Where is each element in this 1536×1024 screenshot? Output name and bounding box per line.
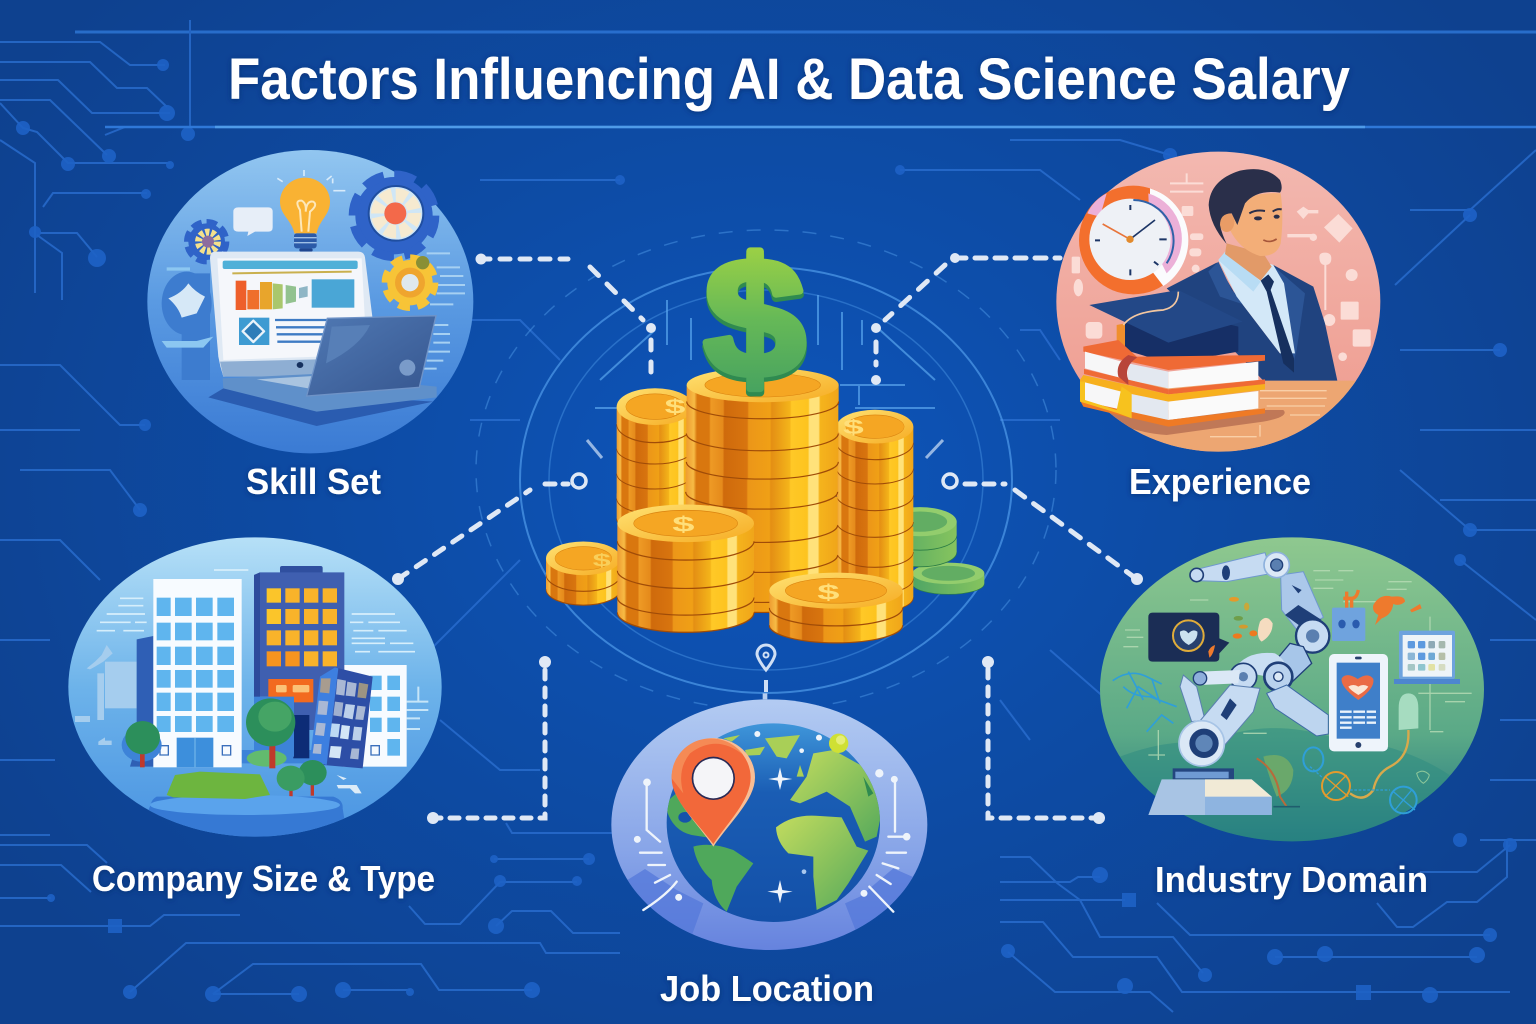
panel: skill set <box>147 150 473 453</box>
panel disc <box>68 537 442 837</box>
icon: large gear <box>353 175 435 256</box>
dollar sign: $ <box>704 224 805 413</box>
icon: DNA helix <box>1303 747 1429 813</box>
lower book <box>1080 375 1265 402</box>
label: industry domain: Industry Domain <box>1155 859 1428 900</box>
flat left coins <box>546 541 621 605</box>
label: job location: Job Location <box>660 968 874 1009</box>
decorative squares <box>1072 173 1371 361</box>
dashed connector: company lower <box>430 658 548 822</box>
chat screen <box>1148 613 1229 662</box>
inner traces <box>430 140 1170 770</box>
diamond icon <box>239 318 269 345</box>
left back coin stack <box>617 388 693 534</box>
dark side building <box>130 636 153 767</box>
dashed connector: industry <box>943 474 1140 582</box>
laptop shadow <box>208 388 433 426</box>
hills <box>628 868 912 934</box>
icon: clock <box>1079 186 1188 294</box>
main coin stack <box>686 368 839 612</box>
background lines <box>97 570 415 652</box>
laptop base <box>223 374 437 412</box>
panel: experience <box>1050 152 1390 457</box>
dashed connector: company <box>394 474 586 582</box>
label: skill set: Skill Set <box>246 461 381 502</box>
concentric radar rings <box>476 230 1056 710</box>
low front coin stack <box>769 573 903 643</box>
face <box>1230 193 1282 256</box>
white building <box>153 579 242 767</box>
robot pedestal <box>1148 768 1272 815</box>
lower left leg <box>1187 685 1260 747</box>
panel disc <box>147 150 473 453</box>
bar chart <box>236 281 308 310</box>
bottom left <box>0 823 620 994</box>
tie <box>1261 274 1294 373</box>
icon: smartphone <box>1329 654 1388 751</box>
suit <box>1167 263 1337 381</box>
icon: yellow gear <box>385 256 435 308</box>
icon: plant <box>1257 755 1300 807</box>
blue tower <box>254 566 344 758</box>
location connector <box>757 645 775 692</box>
base joint <box>1179 721 1224 766</box>
icon: tablet on stand <box>1394 631 1460 684</box>
backdrop shapes <box>162 253 465 380</box>
green coins <box>883 507 984 594</box>
icon: graduation cap <box>1089 290 1243 363</box>
eurasia <box>790 750 883 842</box>
small background building <box>75 645 428 745</box>
right side <box>1395 150 1536 780</box>
trees <box>122 698 327 798</box>
label: company size and type: Company Size & Type <box>92 858 435 899</box>
right coin stack <box>837 410 913 612</box>
icon: book stack <box>1080 340 1265 427</box>
icon: orange gadget <box>1373 596 1422 625</box>
left back coin stack: $ <box>665 396 686 418</box>
dashed connector: industry lower <box>984 658 1102 822</box>
desk <box>1108 380 1356 452</box>
person <box>1167 169 1337 381</box>
panel: job location <box>611 693 927 950</box>
right coin stack: $ <box>843 417 864 439</box>
label: experience: Experience <box>1129 461 1311 502</box>
stars <box>768 767 792 790</box>
ground island <box>148 796 344 837</box>
dashed connector: experience <box>872 254 1060 384</box>
forearm left <box>1200 670 1240 685</box>
upper arm <box>1197 553 1272 582</box>
icon: small gear <box>187 222 227 262</box>
top book <box>1083 340 1265 370</box>
lower right leg <box>1267 685 1328 736</box>
white right building <box>343 665 407 767</box>
central traces <box>587 295 943 458</box>
circuit accents <box>635 770 909 912</box>
dashed connector: skill set <box>478 256 654 380</box>
icon: sensor and cable <box>1350 693 1418 798</box>
hills <box>1120 570 1472 842</box>
hedge <box>167 772 270 799</box>
central coin pile <box>546 224 984 643</box>
south america <box>693 845 753 912</box>
icon: robot module <box>1332 590 1365 641</box>
laptop lid <box>307 316 436 396</box>
front coin stack <box>617 505 754 632</box>
panel disc <box>1056 152 1380 452</box>
globe <box>665 723 883 922</box>
panel: company size and type <box>68 537 442 840</box>
lawn shadow <box>242 750 317 763</box>
laptop screen <box>210 252 372 377</box>
icon: chat bubble <box>233 207 273 236</box>
robot arm <box>1179 552 1329 766</box>
panel: industry domain <box>1090 537 1490 843</box>
front coin stack: $ <box>672 512 695 536</box>
icon: map pin <box>672 738 755 847</box>
north america <box>667 794 706 838</box>
bottom right <box>1000 840 1536 1012</box>
left middle <box>0 365 145 835</box>
title: Factors Influencing AI & Data Science Salary <box>228 47 1350 112</box>
africa <box>776 816 868 910</box>
hair <box>1209 169 1282 244</box>
flat left coins: $ <box>593 550 611 570</box>
dollar sign: $ <box>704 228 805 417</box>
icon: light bulb <box>277 170 345 252</box>
panel disc <box>1100 537 1484 841</box>
torso <box>1233 653 1287 680</box>
low front coin stack: $ <box>817 580 840 604</box>
title underline <box>105 126 1536 128</box>
shirt <box>1218 250 1295 353</box>
panel disc <box>611 699 927 950</box>
top left <box>75 30 1536 34</box>
tilted building <box>310 667 373 768</box>
icon: molecular network <box>1113 672 1177 732</box>
leaf cluster <box>1229 597 1273 642</box>
neck <box>1225 243 1272 281</box>
facial features <box>1249 209 1282 213</box>
greenland and top lands <box>723 735 800 758</box>
